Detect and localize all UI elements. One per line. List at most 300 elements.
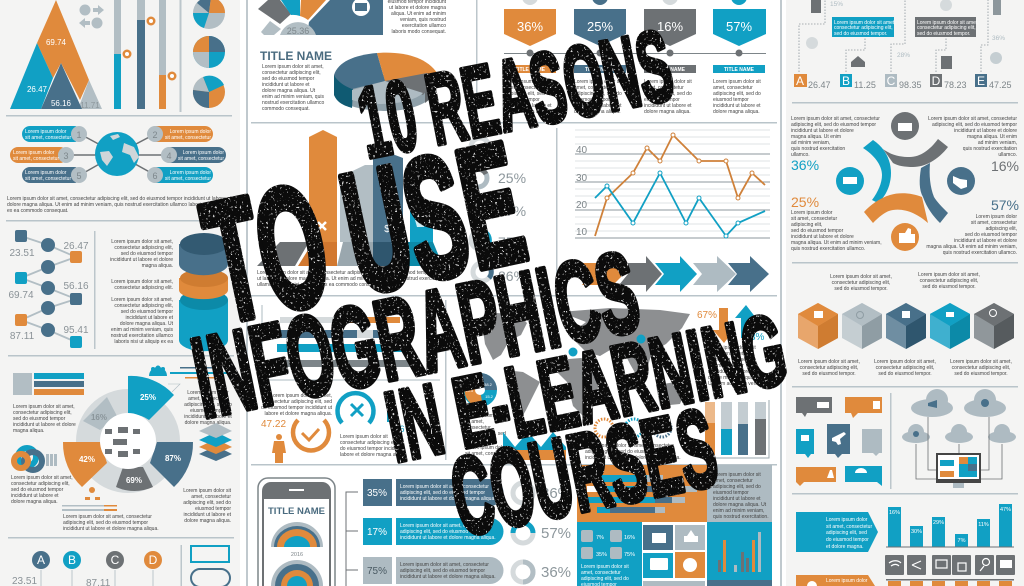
panel: percentage rows: 35% — [367, 488, 387, 499]
panel: dotted timeline: sed do eiusmod tempor. — [834, 31, 887, 37]
panel: lettered circles: D — [149, 553, 158, 567]
text block: donut note top right: adipiscing elit, sed do — [184, 402, 232, 408]
chart: teal column bars: 7% — [958, 538, 966, 544]
text block: donut note right: amet, consectetur — [191, 494, 231, 500]
text block: arrows note: dolore magna aliqua. — [708, 375, 755, 381]
chart: arrow columns: $ — [384, 224, 390, 235]
text block: title note: enim ad minim veniam, quis — [262, 94, 324, 100]
text block: arrows note: eiusmod tempor — [708, 363, 744, 369]
panel: four percent tags — [504, 0, 766, 115]
panel: five cubes: consectetur adipiscing elit, — [920, 278, 978, 284]
panel: speech bubble icons — [796, 397, 882, 486]
panel: four percent tags: dolore magna aliqua. — [713, 109, 760, 115]
chart: ring percentages — [469, 138, 526, 284]
panel: four percent tags: eiusmod tempor — [644, 97, 680, 103]
panel: four arc diagram: adipiscing elit, — [986, 226, 1017, 232]
text block: gantt note: Lorem ipsum dolor sit amet, — [270, 393, 332, 399]
panel: dotted timeline: 78.23 — [944, 80, 967, 90]
panel: lettered circles: C — [111, 553, 120, 567]
text block: donut note right: incididunt ut labore et — [183, 512, 232, 518]
panel: orange arrow note: Lorem ipsum dolor — [826, 578, 868, 584]
panel: grey text block: incididunt ut labore et — [713, 496, 761, 502]
panel: globe with six pills: 1 — [76, 130, 82, 140]
panel: four percent tags: incididunt ut labore et — [574, 103, 622, 109]
panel: four arc diagram: adipiscing elit, sed do eiusmod tempor — [791, 122, 876, 128]
icon: person and check ring — [261, 419, 329, 463]
text block: gantt note: do eiusmod tempor incididunt ut — [261, 405, 333, 411]
panel: dotted timeline: C — [887, 74, 896, 88]
panel: teal stats block — [577, 522, 642, 586]
text block: x ring note: Lorem ipsum dolor sit — [340, 434, 388, 440]
text block: small pie note: Lorem ipsum dolor — [465, 445, 507, 451]
text block: intro paragraph: ex ea commodo consequat. — [7, 208, 68, 214]
panel: globe with six pills: 4 — [166, 151, 172, 161]
panel: network nodes — [8, 230, 96, 349]
panel: dotted timeline: 47.25 — [989, 80, 1012, 90]
panel: mountain chart: 26.47 — [27, 85, 48, 94]
text block: donut note top right: Lorem ipsum dolor — [187, 390, 229, 396]
text block: cylinder notes: consectetur adipiscing elit. — [114, 285, 173, 291]
panel: four percent tags: TITLE NAME — [515, 67, 546, 73]
panel: four arc diagram: Lorem ipsum dolor sit amet, consectetur — [791, 116, 880, 122]
panel: dotted timeline: consectetur adipiscing elit, — [834, 25, 893, 31]
text block: donut note top left: sed do eiusmod tempor — [13, 416, 66, 422]
text block: arrows note: Lorem ipsum dolor sit — [708, 345, 756, 351]
panel: teal arrow note: et dolore magna. — [826, 544, 864, 550]
text block: arrows note: amet, consectetur — [708, 351, 748, 357]
panel: grey text block: amet, consectetur — [713, 478, 753, 484]
panel: globe with six pills: sit amet, consectetur — [13, 156, 59, 162]
panel: four percent tags: incididunt ut labore et — [644, 103, 692, 109]
text block: donut note left: Lorem ipsum dolor sit amet, — [11, 475, 73, 481]
chart: small pie: 38.2 — [484, 382, 493, 387]
text block: top centre note: aliqua. Ut enim ad minim — [391, 11, 446, 17]
chart: line chart: 40 — [576, 145, 588, 156]
panel: four arc diagram: quis nostrud exercitation ullamco. — [943, 250, 1017, 256]
text block: column chart note: ut labore et dolore magna aliqua. Ut enim ad minim veniam, quis nostrud exercitation — [257, 276, 445, 282]
text block: small pie note: sit amet, — [465, 419, 484, 425]
panel: teal stats block: amet, consectetur — [581, 570, 621, 576]
chart: line chart: 10 — [576, 227, 588, 238]
text block: cylinder notes: Lorem ipsum dolor sit amet, — [111, 279, 173, 285]
panel: network nodes: 56.16 — [63, 281, 89, 292]
chart: arrow columns — [257, 130, 443, 266]
panel: four arc diagram: incididunt ut labore et dolore — [791, 128, 854, 134]
chart: percentage rings — [513, 483, 571, 582]
panel: dotted timeline: Lorem ipsum dolor sit amet, — [834, 20, 896, 26]
panel: globe with six pills: sit amet, consectetur — [25, 135, 71, 141]
text block: title note: Lorem ipsum dolor sit amet, — [262, 64, 324, 70]
text block: cylinder notes: Lorem ipsum dolor sit amet, — [111, 297, 173, 303]
panel: four percent tags: dolore magna aliqua. — [504, 109, 551, 115]
chart: ring percentages: 86% — [498, 268, 526, 284]
panel: four arc diagram — [791, 112, 1019, 256]
text block: donut note right: eiusmod tempor — [195, 506, 231, 512]
panel: five cubes: Lorem ipsum dolor sit amet, — [798, 359, 860, 365]
text block: title note: consectetur adipiscing elit, — [262, 70, 321, 76]
panel: globe with six pills: Lorem ipsum dolor — [170, 129, 211, 135]
panel: percentage rows: incididunt ut labore et dolore magna aliqua. — [400, 535, 496, 541]
panel: teal arrow note: Lorem ipsum dolor — [826, 517, 868, 523]
panel: four percent tags: amet, consectetur — [713, 85, 753, 91]
panel: orange chart block — [577, 465, 707, 522]
text block: donut note top right: eiusmod tempor — [190, 408, 226, 414]
text block: intro paragraph: dolore magna aliqua. Ut enim ad minim veniam, quis nostrud exercitation ullamco laboris nisi ut aliquip — [7, 202, 234, 208]
text block: intro paragraph: Lorem ipsum dolor sit amet, consectetur adipiscing elit, sed do eiusmod tempor incididunt ut labore et — [7, 196, 232, 202]
chart: line chart: 30 — [576, 173, 588, 184]
panel: globe with six pills — [10, 126, 226, 183]
text block: gantt note: labore et dolore magna aliqua. — [264, 411, 332, 417]
panel: percentage rows: Lorem ipsum dolor sit amet, consectetur — [400, 562, 489, 568]
panel: dotted timeline: consectetur adipiscing elit, — [917, 25, 976, 31]
panel: four percent tags: Lorem ipsum dolor sit — [644, 79, 692, 85]
panel: five cubes — [798, 272, 1014, 377]
icon row: device tiles — [885, 555, 1015, 586]
panel: globe with six pills: Lorem ipsum dolor — [183, 150, 224, 156]
panel: globe with six pills: Lorem ipsum dolor — [25, 170, 67, 176]
panel: lettered circles — [12, 551, 162, 586]
panel: dotted timeline: 11.25 — [854, 80, 876, 90]
chart: teal column bars — [886, 504, 1014, 548]
panel: percentage rows: 75% — [367, 566, 387, 577]
text block: cylinder notes: sed do eiusmod tempor — [121, 309, 173, 315]
text block: gantt note: consectetur adipiscing elit, sed — [264, 399, 332, 405]
panel: four arc diagram: magna aliqua. Ut enim — [967, 134, 1017, 140]
text block: rings note: adipiscing elit, sed do eiusmod tempor — [585, 449, 670, 455]
panel: teal arrow note: sit amet, consectetur — [826, 524, 872, 530]
panel: four percent tags: amet, consectetur — [504, 85, 544, 91]
panel: percentage rows: Lorem ipsum dolor sit amet, consectetur — [400, 523, 489, 529]
panel: four percent tags: 57% — [726, 19, 752, 34]
panel: four arc diagram: sed do eiusmod tempor — [965, 232, 1017, 238]
panel: lettered circles: A — [37, 553, 45, 567]
text block: cylinder notes: nostrud exercitation ullamco — [111, 333, 173, 339]
text block: arrows note: incididunt ut labore et — [708, 369, 756, 375]
text block: title note: incididunt ut labore et — [262, 82, 310, 88]
panel: four arc diagram: Lorem ipsum dolor sit amet, consectetur — [928, 116, 1017, 122]
panel: segmented donut: 25% — [140, 393, 156, 402]
panel: mountain chart: 56.16 — [51, 99, 72, 108]
panel: lettered circles: B — [68, 553, 76, 567]
panel: dotted timeline: 15% — [830, 1, 843, 8]
panel: globe with six pills: sit amet, consectetur — [165, 135, 211, 141]
icon: stacked bars legend — [13, 373, 84, 395]
panel: four percent tags: Lorem ipsum dolor sit — [574, 79, 622, 85]
panel: four arc diagram: ad minim veniam, — [978, 140, 1017, 146]
panel: segmented donut: 87% — [165, 454, 181, 463]
panel: segmented donut — [63, 376, 193, 493]
title: 10 reasons to use infographics in e-learning courses — [183, 9, 795, 560]
panel: orange arrow note — [796, 575, 875, 586]
text block: donut note right: Lorem ipsum dolor sit — [183, 488, 232, 494]
panel: five cubes: sed do eiusmod tempor. — [834, 286, 888, 292]
icon: callout outlines — [180, 545, 230, 586]
panel: four percent tags: eiusmod tempor — [504, 97, 540, 103]
panel: dotted timeline: Lorem ipsum dolor sit amet, — [917, 20, 979, 26]
panel: four percent tags: 36% — [517, 19, 543, 34]
panel: four percent tags: amet, consectetur — [574, 85, 614, 91]
panel: four percent tags: incididunt ut labore et — [713, 103, 761, 109]
panel: grey text block: eiusmod tempor — [713, 490, 749, 496]
chart: percentage rings: 86% — [541, 485, 571, 502]
text block: cylinder notes: consectetur adipiscing elit, — [114, 245, 173, 251]
text block: donut note top left: magna aliqua. — [13, 428, 44, 434]
text block: donut note top right: incididunt ut labore et — [184, 414, 232, 420]
panel: teal arrow note: do eiusmod tempor — [826, 537, 869, 543]
chart: small pie: 15.3 — [465, 388, 474, 393]
panel: four arc diagram: 16% — [991, 158, 1019, 174]
panel: four arc diagram: quis nostrud exercitation — [791, 146, 845, 152]
panel: five cubes: sed do eiusmod tempor. — [954, 371, 1008, 377]
icon: up and down arrows: 67% — [697, 310, 717, 321]
panel: four percent tags: adipiscing elit, sed do — [644, 91, 692, 97]
chart: percentage rings: 57% — [541, 525, 571, 542]
panel: five cubes: consectetur adipiscing elit, — [832, 280, 890, 286]
panel: cloud network and monitor — [902, 389, 1016, 488]
panel: four percent tags: eiusmod tempor — [713, 97, 749, 103]
panel: four percent tags: Lorem ipsum dolor sit — [713, 79, 761, 85]
icon: person and x ring — [337, 393, 405, 434]
panel: four arc diagram: quis nostrud exercitation — [963, 146, 1017, 152]
panel: percentage rows: incididunt ut labore et dolore magna aliqua. — [400, 574, 496, 580]
text block: small pie note: Lorem ipsum — [465, 413, 494, 419]
panel: five cubes: Lorem ipsum dolor sit amet, — [874, 359, 936, 365]
panel: five cubes: consectetur adipiscing elit, — [952, 365, 1010, 371]
panel: four arc diagram: incididunt ut labore et dolore — [954, 238, 1017, 244]
icon: person and x ring: 1.6 — [392, 424, 405, 434]
panel: four percent tags: eiusmod tempor — [574, 97, 610, 103]
panel: four arc diagram: incididunt ut labore et dolore — [954, 128, 1017, 134]
text block: cylinder notes: dolore magna aliqua. Ut — [120, 321, 174, 327]
panel: teal arrow note: adipiscing elit, sed — [826, 530, 867, 536]
panel: network nodes: 87.11 — [10, 331, 35, 342]
panel: four arc diagram: 25% — [791, 194, 819, 210]
icon: layers — [199, 423, 232, 461]
panel: mountain chart — [10, 0, 102, 110]
panel: dotted timeline: 26.47 — [808, 80, 831, 90]
icon: map pins — [482, 328, 646, 356]
panel: four percent tags: Lorem ipsum dolor sit — [504, 79, 552, 85]
icon: tile grid — [643, 525, 705, 586]
panel: five cubes: sed do eiusmod tempor. — [878, 371, 932, 377]
text block: title note: sed do eiusmod tempor — [262, 76, 315, 82]
panel: dotted timeline: D — [932, 74, 941, 88]
panel: four arc diagram: 57% — [991, 197, 1019, 213]
panel: dotted timeline: sed do eiusmod tempor. — [917, 31, 970, 37]
panel: globe with six pills: Lorem ipsum dolor — [170, 170, 211, 176]
title: 10 reasons to use infographics in e-learning courses: COURSES — [441, 386, 726, 560]
chart: teal column bars: 29% — [933, 520, 944, 526]
panel: four percent tags: amet, consectetur — [644, 85, 684, 91]
panel: four arc diagram: ad minim veniam, — [791, 140, 830, 146]
panel: phone mockup: TITLE NAME — [268, 506, 325, 517]
panel: dotted timeline: A — [796, 74, 804, 88]
chart: ring percentages: 25% — [498, 170, 526, 186]
text block: small pie note: sit amet, consectetur — [465, 451, 511, 457]
panel: grey text block: dolore magna aliqua. Ut — [713, 502, 767, 508]
panel: network nodes: 26.47 — [63, 241, 89, 252]
text block: title note: dolore magna aliqua. Ut — [262, 88, 316, 94]
panel: four arc diagram: adipiscing elit, — [791, 222, 822, 228]
text block: top centre note: ut labore et dolore magna — [389, 5, 446, 11]
panel: globe with six pills: 6 — [152, 171, 158, 181]
text block: small pie note: adipiscing elit, sed — [465, 431, 506, 437]
chart: three pies — [193, 0, 225, 108]
text block: cylinder notes: sed do eiusmod tempor — [121, 251, 173, 257]
text block: donut note left: sed do eiusmod tempor — [11, 487, 64, 493]
panel: globe with six pills: 5 — [76, 171, 82, 181]
icon: currency arrows — [79, 4, 104, 28]
chart: grid bars — [700, 400, 769, 458]
text block: rings note: Lorem ipsum dolor sit amet, consectetur — [585, 443, 674, 449]
panel: four percent tags: adipiscing elit, sed do — [713, 91, 761, 97]
panel: phone mockup — [258, 478, 335, 586]
text block: donut note bottom: adipiscing elit, sed do eiusmod tempor — [63, 520, 148, 526]
text block: donut note left: incididunt ut labore et — [11, 493, 59, 499]
panel: four percent tags: adipiscing elit, sed do — [504, 91, 552, 97]
panel: dotted timeline: 28% — [897, 52, 910, 59]
panel: grey text block: Lorem ipsum dolor sit — [713, 472, 761, 478]
panel: network nodes: 69.74 — [8, 290, 34, 301]
text block: donut note left: dolore magna aliqua. — [11, 499, 58, 505]
chart: stacked cylinder — [179, 233, 228, 351]
text block: x ring note: consectetur adipiscing elit — [340, 440, 398, 446]
panel: globe with six pills: Lorem ipsum dolor — [25, 129, 67, 135]
panel: four arc diagram: quis nostrud exercitation ullamco. — [791, 246, 865, 252]
panel: dotted timeline: 98.35 — [899, 80, 922, 90]
text block: small pie note: consectetur — [465, 425, 491, 431]
chart: line chart: 20 — [576, 200, 588, 211]
text block: column chart note: ullamco laboris nisi ut aliquip ex ea commodo consequat. — [257, 282, 383, 288]
panel: globe with six pills: 3 — [63, 151, 69, 161]
text block: title note: nostrud exercitation ullamco — [262, 100, 324, 106]
text block: donut note left: consectetur adipiscing elit, — [11, 481, 70, 487]
panel: four arc diagram: magna aliqua. Ut enim ad minim veniam, — [926, 244, 1017, 250]
text block: cylinder notes: enim ad minim veniam, quis — [111, 327, 173, 333]
icon: venn rings — [14, 448, 42, 470]
panel: network nodes: 95.41 — [63, 325, 89, 336]
text block: arrows note: adipiscing elit, sed do — [708, 357, 756, 363]
panel: five cubes: Lorem ipsum dolor sit amet, — [830, 274, 892, 280]
chart: ring percentages: 75% — [498, 234, 526, 250]
panel: teal arrow note — [796, 512, 878, 552]
panel: percentage rows: adipiscing elit, sed do eiusmod tempor — [400, 529, 485, 535]
panel: five cubes: sed do eiusmod tempor. — [802, 371, 856, 377]
panel: segmented donut: 16% — [91, 413, 107, 422]
text block: donut note bottom: incididunt ut labore et dolore magna aliqua. — [63, 526, 159, 532]
panel: five cubes: consectetur adipiscing elit, — [876, 365, 934, 371]
panel: fan chart — [258, 0, 383, 36]
panel: four arc diagram: 36% — [791, 157, 819, 173]
text block: donut note top left: incididunt ut labore et dolore — [13, 422, 76, 428]
chart: teal column bars: 30% — [911, 529, 922, 535]
text block: donut note bottom: Lorem ipsum dolor sit amet, consectetur — [63, 514, 152, 520]
panel: phone mockup: 2016 — [291, 552, 303, 558]
text block: donut note right: adipiscing elit, sed do — [183, 500, 231, 506]
panel: four percent tags: TITLE NAME — [585, 67, 616, 73]
text block: x ring note: labore et dolore magna aliq — [340, 452, 401, 458]
panel: dotted timeline: B — [842, 74, 850, 88]
panel: four arc diagram: ullamco. — [791, 152, 810, 158]
panel: grey text block: adipiscing elit, sed do — [713, 484, 761, 490]
panel: four arc diagram: adipiscing elit, sed do eiusmod tempor — [932, 122, 1017, 128]
chart: teal column bars: 47% — [1000, 507, 1011, 513]
panel: teal stats block: adipiscing elit, sed do — [581, 576, 629, 582]
panel: teal stats block: 16% — [624, 535, 635, 541]
panel: four percent tags: incididunt ut labore et — [504, 103, 552, 109]
panel: four arc diagram: magna aliqua. Ut enim ad minim veniam, — [791, 240, 882, 246]
panel: percentage rows: adipiscing elit, sed do eiusmod tempor — [400, 490, 485, 496]
panel: five cubes: sed do eiusmod tempor. — [922, 284, 976, 290]
chart: ring percentages: 17% — [498, 203, 526, 219]
chart: teal column bars: 11% — [978, 522, 989, 528]
panel: percentage rows — [346, 479, 504, 586]
panel: percentage rows: adipiscing elit, sed do eiusmod tempor — [400, 568, 485, 574]
panel: four percent tags: dolore magna aliqua. — [644, 109, 691, 115]
panel: four arc diagram: sit amet, consectetur — [971, 220, 1017, 226]
panel: five cubes: Lorem ipsum dolor sit amet, — [950, 359, 1012, 365]
panel: four arc diagram: sed do eiusmod tempor — [791, 228, 844, 234]
panel: four percent tags: dolore magna aliqua. — [574, 109, 621, 115]
panel: four percent tags: 25% — [587, 19, 613, 34]
text block: donut note top left: Lorem ipsum dolor sit amet, — [13, 404, 75, 410]
chart: line chart — [575, 130, 770, 238]
chart: zigzag area — [503, 432, 566, 460]
chart: dotted rings — [595, 419, 671, 437]
panel: four arc diagram: Lorem ipsum dolor — [976, 214, 1017, 220]
text block: donut note top left: consectetur adipiscing elit, — [13, 410, 72, 416]
panel: percentage rows: incididunt ut labore et dolore magna aliqua. — [400, 496, 496, 502]
panel: four percent tags: TITLE NAME — [655, 67, 686, 73]
text block: cylinder notes: consectetur adipiscing elit, — [114, 303, 173, 309]
icon: up and down arrows: 8% — [750, 332, 765, 343]
text block: cylinder notes: incididunt ut labore et — [125, 315, 174, 321]
text block: arrows note: Ut enim ad minim veniam — [708, 381, 764, 387]
text block: cylinder notes: Lorem ipsum dolor sit amet, — [111, 239, 173, 245]
panel: grey text block — [707, 465, 772, 522]
chart: vertical gauges — [114, 0, 182, 112]
panel: grey text block: enim ad minim veniam, — [713, 508, 764, 514]
panel: teal stats block: 75% — [624, 552, 635, 558]
icon: person and check ring: 47.22 — [261, 419, 286, 430]
panel: mountain chart: 11.71 — [80, 101, 100, 110]
panel: dotted timeline: 36% — [992, 35, 1005, 42]
panel: teal stats block: 7% — [596, 535, 604, 541]
panel: four arc diagram: sit amet, consectetur — [791, 216, 837, 222]
panel: network nodes: 23.51 — [9, 248, 35, 259]
panel: segmented donut: 42% — [79, 455, 95, 464]
text block: donut note right: dolore magna aliqua. — [184, 518, 231, 524]
panel: percentage rows: Lorem ipsum dolor sit amet, consectetur — [400, 484, 489, 490]
text block: cylinder notes: laboris nisi ut aliquip ex ea — [114, 339, 173, 345]
panel: four percent tags: TITLE NAME — [724, 67, 755, 73]
chart: teal column bars: 16% — [889, 510, 900, 516]
panel: globe with six pills: sit amet, consectetur — [165, 176, 211, 182]
panel: dotted timeline — [794, 0, 1012, 90]
panel: globe with six pills: Lorem ipsum dolor — [13, 150, 55, 156]
text block: cylinder notes: magna aliqua. — [142, 263, 173, 269]
icon: people and legend bars — [149, 366, 235, 392]
panel: percentage rows: 17% — [367, 527, 387, 538]
panel: five cubes: consectetur adipiscing elit, — [800, 365, 858, 371]
icon: up and down arrows — [697, 305, 765, 343]
panel: four arc diagram: ullamco. — [998, 152, 1017, 158]
chart: small pie — [463, 373, 497, 407]
panel: dotted timeline: E — [977, 74, 985, 88]
panel: grey text block: quis nostrud exercitation. — [713, 514, 769, 520]
panel: teal stats block: Lorem ipsum dolor sit — [581, 564, 629, 570]
text block: donut note top right: amet, consectetur — [188, 396, 228, 402]
